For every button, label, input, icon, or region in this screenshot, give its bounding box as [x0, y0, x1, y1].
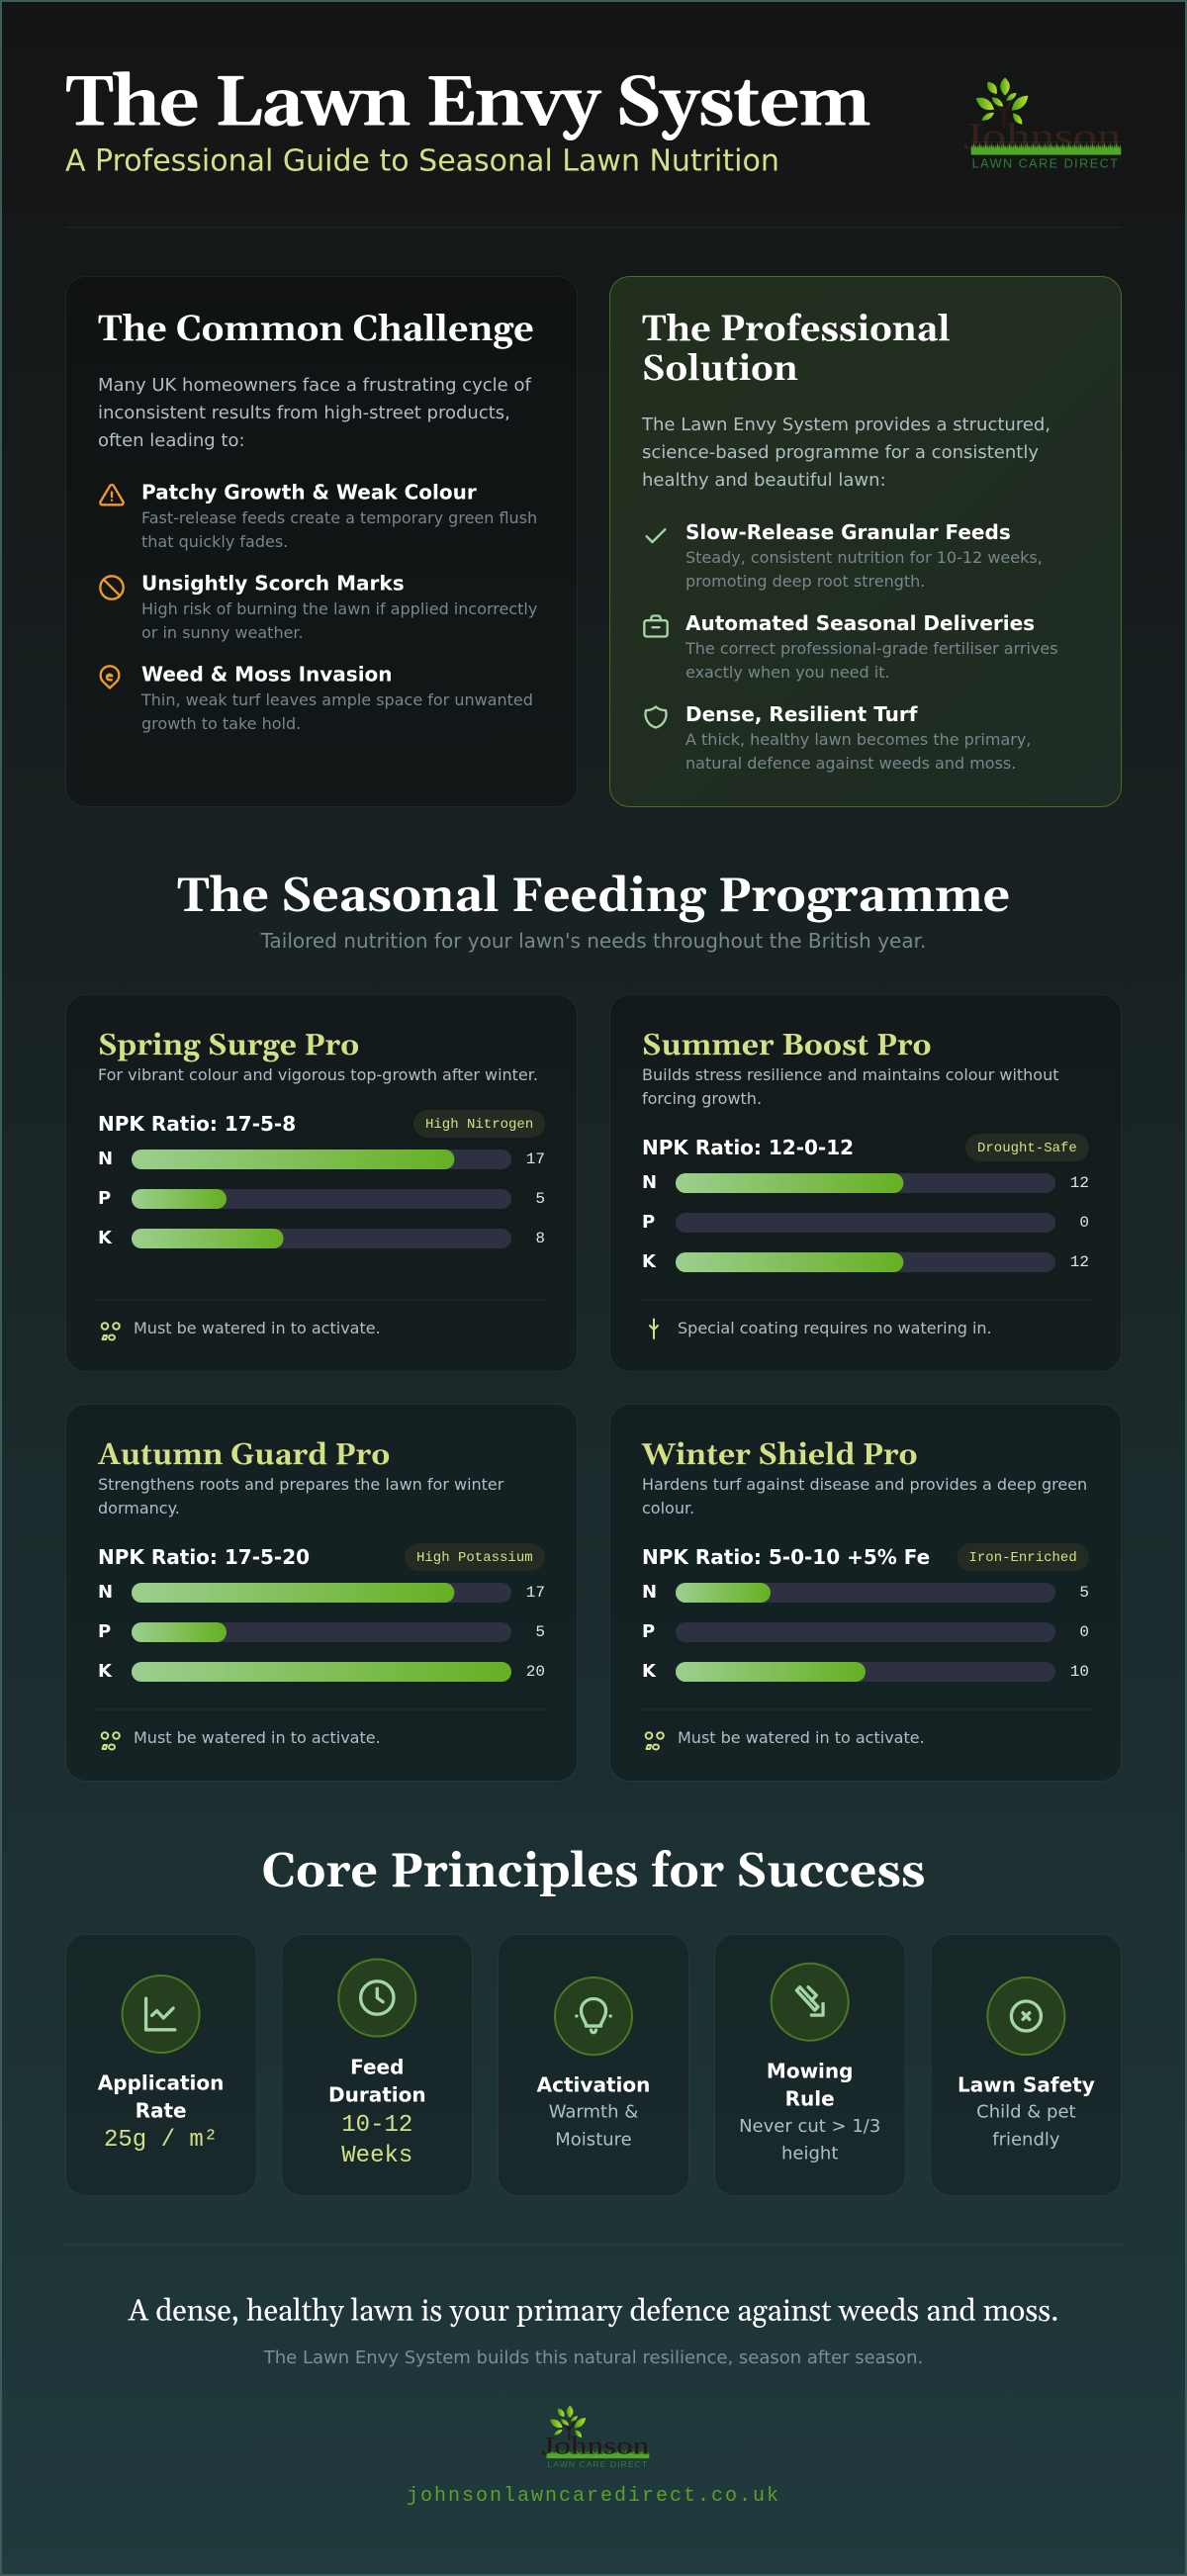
- intro text: Many UK homeowners face a frustrating cycle of: [98, 375, 531, 396]
- icon: map pin: [101, 666, 119, 689]
- intro text: science-based programme for a consistently: [642, 442, 1039, 463]
- item: deliveries: exactly when you need it.: [685, 663, 890, 682]
- principle: lawn safety: friendly: [992, 2130, 1060, 2151]
- principle: mowing rule: Rule: [785, 2086, 835, 2110]
- item: scorch marks: Unsightly Scorch Marks: [141, 572, 405, 596]
- icon: shield: [646, 707, 666, 728]
- badge: Drought-Safe: [977, 1141, 1077, 1156]
- item: slow release: [647, 520, 1043, 591]
- card: Autumn Guard Pro: Must be watered in to activate.: [134, 1728, 381, 1747]
- item: scorch marks: [100, 572, 537, 642]
- intro text: healthy and beautiful lawn:: [642, 470, 886, 491]
- NPK bars: 5: [1079, 1584, 1089, 1602]
- NPK bars: P: [98, 1621, 111, 1642]
- heading: seasonal programme: The Seasonal Feeding Programme: [177, 868, 1010, 928]
- item: deliveries: Automated Seasonal Deliveries: [685, 611, 1035, 635]
- icon: circle x: [1011, 2001, 1041, 2031]
- panel heading: The Professional: [642, 309, 951, 353]
- card: Spring Surge Pro: For vibrant colour and vigorous top-growth after winter.: [98, 1065, 538, 1084]
- card: Winter Shield Pro: Winter Shield Pro: [641, 1437, 918, 1475]
- principle: activation: [499, 1935, 688, 2196]
- NPK bars: 0: [1079, 1623, 1089, 1641]
- heading: core principles: Core Principles for Success: [262, 1843, 925, 1903]
- card: Summer Boost Pro: Summer Boost Pro: [642, 1028, 932, 1065]
- item: slow release: Slow-Release Granular Feeds: [685, 520, 1011, 544]
- item: patchy growth: that quickly fades.: [141, 532, 288, 551]
- panel heading: The Common Challenge: [98, 309, 534, 353]
- closing statement: A dense, healthy lawn is your primary defence against weeds and moss.: [128, 2293, 1058, 2331]
- principle: feed duration: 10-12: [341, 2112, 412, 2139]
- principle: lawn safety: Child & pet: [976, 2102, 1076, 2123]
- card: Summer Boost Pro: Special coating requires no watering in.: [678, 1319, 992, 1337]
- NPK bars: K: [642, 1251, 657, 1272]
- footer logo: LAWN CARE DIRECT: [547, 2459, 648, 2469]
- website URL: johnsonlawncaredirect.co.uk: [407, 2485, 780, 2508]
- card: Winter Shield Pro: colour.: [642, 1499, 694, 1518]
- NPK bars: [98, 1582, 545, 1682]
- panel: The Common Challenge: [65, 277, 578, 807]
- card: Summer Boost Pro: Builds stress resilience and maintains colour without: [642, 1065, 1058, 1084]
- badge: High Nitrogen: [425, 1117, 533, 1133]
- item: weed invasion: growth to take hold.: [141, 714, 301, 733]
- principle: feed duration: Duration: [328, 2083, 426, 2107]
- icon: plant: [650, 1320, 658, 1338]
- principle: application rate: 25g / m²: [104, 2127, 218, 2154]
- item: scorch marks: High risk of burning the lawn if applied incorrectly: [141, 599, 537, 618]
- NPK bars: K: [98, 1661, 113, 1682]
- NPK bars: [642, 1582, 1089, 1682]
- icon: briefcase: [644, 616, 668, 637]
- NPK bars: 17: [526, 1584, 545, 1602]
- closing subtext: The Lawn Envy System builds this natural resilience, season after season.: [263, 2347, 923, 2368]
- badge: [413, 1110, 545, 1138]
- item: patchy growth: Fast-release feeds create a temporary green flush: [141, 508, 537, 527]
- NPK bars: 12: [1070, 1253, 1089, 1271]
- NPK bars: N: [642, 1172, 657, 1193]
- badge: [965, 1134, 1089, 1161]
- principle: application rate: Rate: [136, 2099, 187, 2123]
- principle: activation: Activation: [537, 2073, 650, 2097]
- panel heading: Solution: [642, 348, 798, 393]
- NPK bars: [98, 1149, 545, 1248]
- NPK bars: 17: [526, 1150, 545, 1168]
- principle: mowing rule: [714, 1935, 905, 2196]
- principle: activation: Warmth &: [549, 2102, 638, 2123]
- item: weed invasion: [101, 663, 533, 733]
- badge: Iron-Enriched: [969, 1550, 1077, 1566]
- icon: clock: [361, 1981, 394, 2014]
- icon: granules: [646, 1732, 664, 1749]
- principle: feed duration: Weeks: [341, 2143, 412, 2169]
- item: slow release: promoting deep root strength.: [685, 572, 925, 591]
- NPK bars: 5: [535, 1190, 545, 1208]
- icon: granules: [102, 1732, 120, 1749]
- intro text: often leading to:: [98, 430, 245, 451]
- NPK bars: [642, 1172, 1089, 1272]
- card: Summer Boost Pro: [609, 995, 1122, 1371]
- item: resilient turf: natural defence against weeds and moss.: [685, 754, 1016, 773]
- badge: [405, 1543, 545, 1571]
- NPK bars: 5: [535, 1623, 545, 1641]
- card: Spring Surge Pro: Must be watered in to activate.: [134, 1319, 381, 1337]
- footer logo: [541, 2406, 650, 2469]
- NPK bars: N: [98, 1149, 113, 1169]
- card: Spring Surge Pro: NPK Ratio: 17-5-8: [98, 1112, 296, 1136]
- principle: application rate: [65, 1935, 256, 2196]
- section subtitle: Tailored nutrition for your lawn's needs throughout the British year.: [260, 929, 926, 953]
- item: weed invasion: Thin, weak turf leaves ample space for unwanted: [140, 690, 533, 709]
- intro text: The Lawn Envy System provides a structured,: [641, 414, 1050, 435]
- icon: bulb: [577, 1999, 610, 2033]
- item: resilient turf: Dense, Resilient Turf: [685, 702, 918, 726]
- item: patchy growth: Patchy Growth & Weak Colour: [141, 481, 477, 505]
- NPK bars: K: [98, 1228, 113, 1248]
- logo: Johnson Lawn Care Direct: LAWN CARE DIRECT: [972, 156, 1118, 170]
- badge: High Potassium: [416, 1550, 533, 1566]
- NPK bars: K: [642, 1661, 657, 1682]
- principle: feed duration: Feed: [350, 2056, 404, 2079]
- card: Summer Boost Pro: NPK Ratio: 12-0-12: [642, 1136, 854, 1159]
- card: Autumn Guard Pro: NPK Ratio: 17-5-20: [98, 1545, 310, 1569]
- title: The Lawn Envy System: [65, 59, 870, 150]
- principle: activation: Moisture: [555, 2130, 632, 2151]
- icon: granules: [102, 1323, 120, 1339]
- item: resilient turf: A thick, healthy lawn becomes the primary,: [685, 730, 1031, 749]
- card: Spring Surge Pro: Spring Surge Pro: [98, 1028, 359, 1065]
- principle: mowing rule: Never cut > 1/3: [739, 2116, 880, 2137]
- icon: mower: [796, 1987, 823, 2015]
- card: Winter Shield Pro: [609, 1405, 1122, 1781]
- icon: ban circle: [100, 576, 124, 599]
- subtitle: A Professional Guide to Seasonal Lawn Nutrition: [65, 144, 779, 178]
- panel: The Professional Solution: [609, 277, 1122, 807]
- NPK bars: 0: [1079, 1214, 1089, 1232]
- NPK bars: P: [98, 1188, 111, 1209]
- intro text: inconsistent results from high-street products,: [98, 403, 510, 423]
- NPK bars: 8: [535, 1230, 545, 1247]
- principle: mowing rule: height: [781, 2144, 838, 2164]
- badge: [958, 1543, 1089, 1571]
- card: Winter Shield Pro: Must be watered in to activate.: [678, 1728, 925, 1747]
- item: weed invasion: Weed & Moss Invasion: [141, 663, 393, 687]
- NPK bars: P: [642, 1621, 655, 1642]
- icon: chart: [146, 1998, 175, 2030]
- NPK bars: 10: [1070, 1663, 1089, 1681]
- card: Autumn Guard Pro: Strengthens roots and prepares the lawn for winter: [98, 1475, 504, 1494]
- icon: check: [647, 529, 665, 542]
- card: Spring Surge Pro: [65, 995, 578, 1371]
- logo: Johnson Lawn Care Direct: [963, 77, 1122, 170]
- card: Winter Shield Pro: NPK Ratio: 5-0-10 +5% Fe: [642, 1545, 930, 1569]
- card: Autumn Guard Pro: [65, 1405, 578, 1781]
- card: Summer Boost Pro: forcing growth.: [642, 1089, 762, 1108]
- item: resilient turf: [646, 702, 1031, 773]
- item: deliveries: The correct professional-grade fertiliser arrives: [685, 639, 1058, 658]
- NPK bars: 12: [1070, 1174, 1089, 1192]
- card: Autumn Guard Pro: dormancy.: [98, 1499, 180, 1518]
- NPK bars: 20: [526, 1663, 545, 1681]
- principle: application rate: Application: [98, 2071, 224, 2095]
- NPK bars: P: [642, 1212, 655, 1233]
- footer logo: Johnson: [541, 2432, 650, 2460]
- principle: mowing rule: Mowing: [767, 2060, 853, 2083]
- logo: Johnson Lawn Care Direct: Johnson: [963, 117, 1122, 157]
- card: Winter Shield Pro: Hardens turf against disease and provides a deep green: [642, 1475, 1087, 1494]
- item: patchy growth: [100, 481, 537, 551]
- icon: warning triangle: [100, 485, 124, 505]
- NPK bars: N: [98, 1582, 113, 1603]
- item: scorch marks: or in sunny weather.: [141, 623, 304, 642]
- item: slow release: Steady, consistent nutrition for 10-12 weeks,: [685, 548, 1043, 567]
- principle: lawn safety: Lawn Safety: [958, 2073, 1095, 2097]
- card: Autumn Guard Pro: Autumn Guard Pro: [97, 1437, 390, 1475]
- header: [65, 59, 1122, 178]
- principle: feed duration: [282, 1935, 473, 2196]
- item: deliveries: [644, 611, 1058, 682]
- NPK bars: N: [642, 1582, 657, 1603]
- principle: lawn safety: [931, 1935, 1122, 2196]
